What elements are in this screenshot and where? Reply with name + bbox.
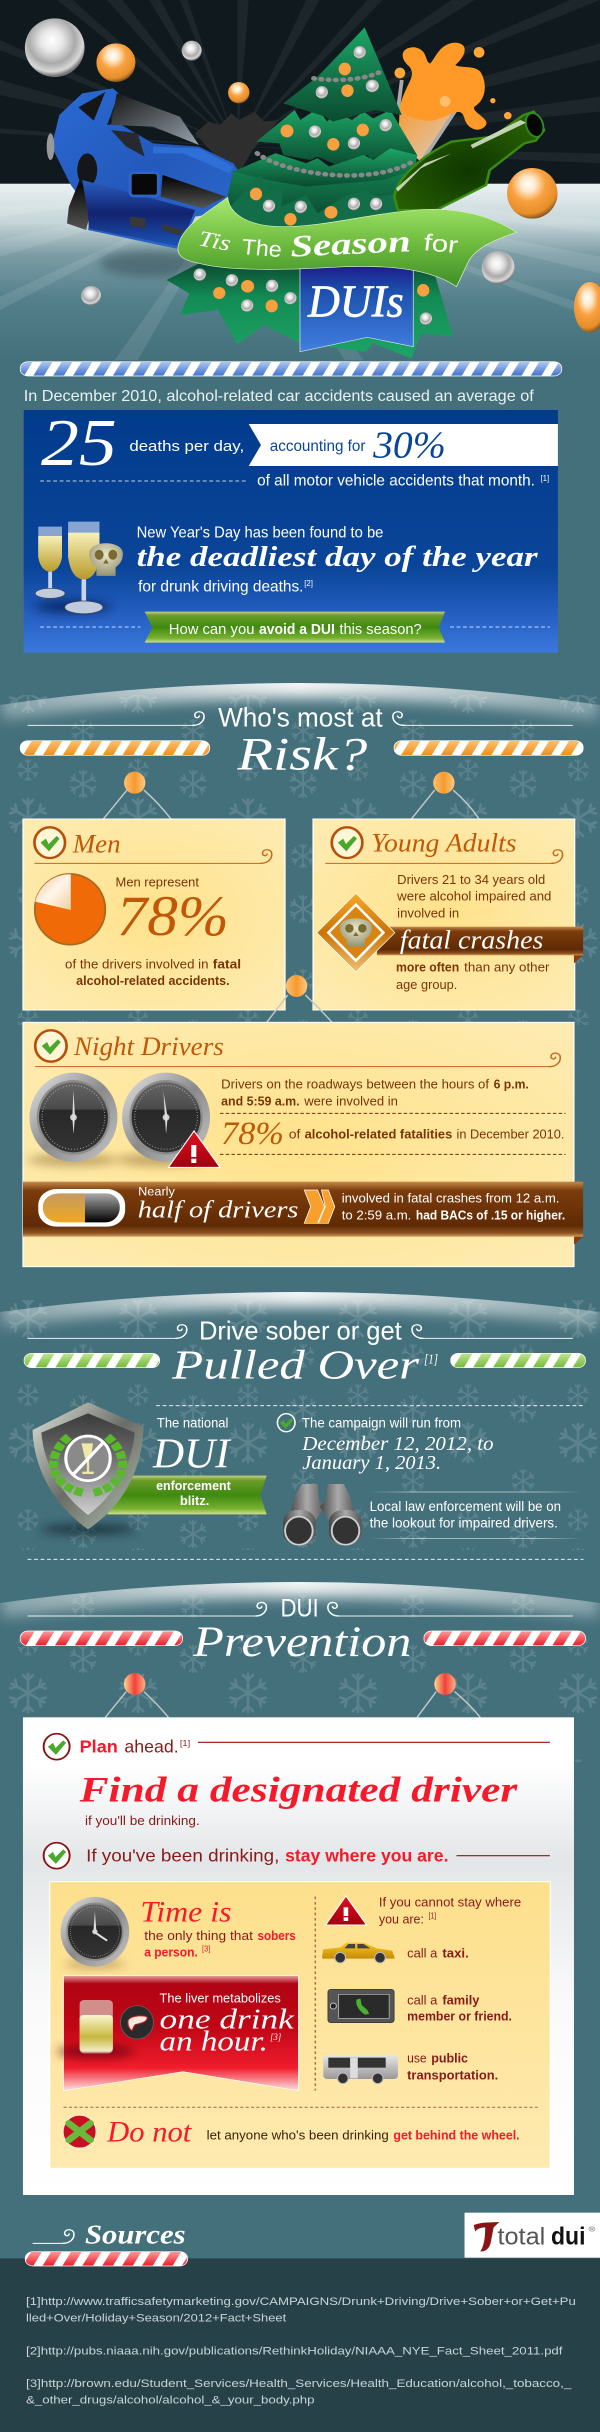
section: who's most at risk bbox=[20, 703, 583, 1023]
text: call a family member: call a bbox=[407, 1993, 437, 2008]
text: plan ahead: ahead. bbox=[124, 1737, 179, 1756]
icon: clock bbox=[61, 1897, 129, 1968]
text: source links: [1]http://www.trafficsafetymarketing.gov/CAMPAIGNS/Drunk+Driving/Drive+Sober+or+Get+Pu bbox=[26, 2295, 576, 2308]
green title banner: for bbox=[422, 230, 460, 259]
heading: who's most at risk: Who's most at bbox=[218, 703, 383, 733]
header illustration bbox=[0, 0, 600, 360]
text: use public transportation: use bbox=[407, 2052, 427, 2066]
text: find a designated driver: Find a designated driver bbox=[78, 1770, 518, 1810]
ribbon: one drink an hour bbox=[57, 1976, 298, 2091]
text: do not: get behind the wheel. bbox=[393, 2128, 520, 2143]
icon: Christmas tree bbox=[224, 27, 417, 230]
stat: 25 deaths: deaths per day, bbox=[129, 439, 244, 455]
text: drivers 21 to 34: were alcohol impaired and bbox=[396, 890, 551, 904]
icon: DUI shield bbox=[33, 1402, 143, 1535]
stat: 30 percent ribbon bbox=[249, 423, 558, 466]
icon: orange drink splash bbox=[395, 43, 512, 162]
red candy bar bbox=[25, 2252, 187, 2266]
text: source links bbox=[26, 2295, 576, 2406]
text: stay where you are: If you've been drinking, bbox=[86, 1846, 279, 1865]
heading: night drivers: Night Drivers bbox=[73, 1033, 224, 1062]
logo: total dui: total bbox=[497, 2224, 545, 2250]
intro sentence: In December 2010, alcohol-related car accidents caused an average of bbox=[24, 388, 534, 405]
text: time is: sobers bbox=[258, 1929, 296, 1944]
text: call a taxi bbox=[407, 1947, 469, 1961]
ribbon: one drink an hour: an hour. bbox=[160, 2026, 268, 2057]
heading: who's most at risk: Risk? bbox=[236, 728, 367, 780]
heading: pulled over: Drive sober or get bbox=[199, 1316, 402, 1345]
text: campaign dates: December 12, 2012, to bbox=[301, 1432, 494, 1455]
ribbon: one drink an hour: The liver metabolizes bbox=[160, 1992, 281, 2006]
icon: warning triangle bbox=[168, 1131, 220, 1167]
ribbon: fatal crashes bbox=[377, 926, 583, 963]
text: call a taxi: taxi. bbox=[442, 1947, 469, 1961]
logo: total dui bbox=[465, 2213, 600, 2258]
stat: 78 percent of fatalities: of bbox=[289, 1128, 300, 1142]
text: use public transportation bbox=[407, 2052, 498, 2083]
text: stay where you are bbox=[86, 1846, 448, 1865]
ribbon: half of drivers: Nearly bbox=[138, 1184, 175, 1198]
text: hours: 6 p.m. bbox=[494, 1077, 529, 1092]
orange candy bars bbox=[20, 741, 583, 755]
icon: check mark bbox=[44, 1843, 70, 1869]
text: call a family member: member or friend. bbox=[407, 2010, 512, 2024]
callout: how can you avoid a DUI: this season? bbox=[339, 622, 422, 638]
text: deadliest day: New Year's Day has been found to be bbox=[137, 524, 383, 541]
icon: phone bbox=[328, 1989, 394, 2023]
text: do not: Do not bbox=[106, 2115, 192, 2148]
icon: right clock bbox=[116, 1073, 210, 1166]
text: fatal accidents: alcohol-related accidents. bbox=[76, 974, 230, 989]
text: if you cannot stay bbox=[379, 1896, 521, 1927]
text: campaign dates: January 1, 2013. bbox=[302, 1451, 441, 1474]
ribbon: half of drivers bbox=[23, 1182, 583, 1244]
heading: sources: Sources bbox=[85, 2220, 186, 2250]
text: plan ahead: [1] bbox=[180, 1739, 190, 1748]
logo: total dui: dui bbox=[551, 2221, 585, 2250]
text: time is: [3] bbox=[202, 1944, 210, 1954]
blue DUIs flag: DUIs bbox=[307, 278, 404, 327]
section: DUI prevention bbox=[20, 1594, 585, 2195]
text: deadliest day: for drunk driving deaths. bbox=[138, 578, 303, 595]
heading: sources bbox=[33, 2220, 186, 2250]
text: drivers 21 to 34: Drivers 21 to 34 years old bbox=[397, 873, 545, 888]
text: if you cannot stay: If you cannot stay where bbox=[379, 1896, 521, 1910]
ribbon: half of drivers: half of drivers bbox=[138, 1196, 298, 1223]
text: fatal accidents bbox=[65, 957, 241, 989]
text: use public transportation: public bbox=[431, 2052, 468, 2066]
text: drivers 21 to 34 bbox=[396, 873, 551, 921]
heading: DUI prevention: DUI bbox=[280, 1594, 319, 1622]
text: drivers 21 to 34: involved in bbox=[397, 906, 459, 921]
icon: check mark bbox=[332, 827, 362, 858]
text: deadliest day bbox=[137, 524, 539, 595]
text: of all motor vehicle accidents: [1] bbox=[541, 474, 549, 483]
stat: 78 percent of fatalities: in December 2010. bbox=[457, 1128, 564, 1142]
section: drive sober or get pulled over bbox=[24, 1316, 585, 1559]
text: local law enforcement: Local law enforcement will be on bbox=[370, 1499, 561, 1515]
ribbon: one drink an hour: one drink bbox=[160, 2003, 295, 2035]
icon: red X bbox=[63, 2115, 96, 2148]
icon: left clock bbox=[28, 1073, 118, 1166]
text: local law enforcement bbox=[370, 1499, 561, 1531]
green enforcement banner: enforcement bbox=[156, 1479, 231, 1494]
stat: 78 percent of fatalities: 78% bbox=[221, 1115, 284, 1151]
callout: how can you avoid a DUI bbox=[145, 612, 445, 643]
green enforcement banner bbox=[107, 1476, 267, 1514]
heading: DUI prevention: Prevention bbox=[192, 1618, 411, 1666]
text: fatal accidents: of the drivers involved in bbox=[65, 957, 209, 972]
tree baubles bbox=[194, 46, 432, 325]
snow decoration: risk section bbox=[0, 683, 600, 1025]
text: source links: lled+Over/Holiday+Season/2012+Fact+Sheet bbox=[26, 2311, 287, 2324]
stat: 30 percent ribbon: 30% bbox=[372, 423, 446, 466]
text: deadliest day: [2] bbox=[304, 579, 313, 588]
snow decoration: prevention section bbox=[0, 1582, 600, 1762]
pins and strings bbox=[103, 772, 479, 819]
green title banner: Tis bbox=[196, 227, 233, 256]
text: more often bbox=[396, 961, 550, 993]
text: source links: [3]http://brown.edu/Student_Services/Health_Services/Health_Education/alcohol,_tobacco,_ bbox=[26, 2377, 572, 2390]
text: use public transportation: transportation. bbox=[407, 2068, 498, 2083]
text: hours bbox=[221, 1077, 529, 1109]
blue candy bar bbox=[20, 362, 562, 376]
green enforcement banner: blitz. bbox=[180, 1494, 209, 1509]
text: hours: and 5:59 a.m. bbox=[221, 1094, 300, 1109]
icon: check mark bbox=[35, 1030, 67, 1062]
text: if you cannot stay: [1] bbox=[429, 1911, 436, 1920]
logo: total dui: ® bbox=[589, 2226, 596, 2234]
text: local law enforcement: the lookout for impaired drivers. bbox=[370, 1516, 558, 1531]
text: call a family member bbox=[407, 1993, 512, 2024]
ribbon: one drink an hour: [3] bbox=[270, 2033, 281, 2043]
panel: white prevention card bbox=[23, 1717, 574, 2195]
icon: grey crash burst bbox=[195, 112, 279, 177]
text: call a taxi: call a bbox=[407, 1947, 437, 1961]
icon: champagne glasses and skull bbox=[34, 522, 123, 614]
icon: small check bbox=[277, 1414, 295, 1432]
text: more often: more often bbox=[396, 961, 459, 975]
heading: pulled over: Pulled Over bbox=[171, 1341, 420, 1388]
green title banner: Season bbox=[289, 225, 412, 264]
text: time is: the only thing that bbox=[144, 1929, 253, 1944]
ornament balls bbox=[25, 18, 600, 333]
ribbon: half of drivers: involved in fatal crashes from 12 a.m. bbox=[342, 1192, 559, 1205]
snowy ground with rays bbox=[0, 184, 600, 360]
stat: 30 percent ribbon: accounting for bbox=[270, 438, 366, 455]
stat: 25 deaths bbox=[41, 406, 244, 480]
green title banner: The bbox=[241, 235, 283, 263]
ribbon: half of drivers: to 2:59 a.m. bbox=[342, 1208, 411, 1222]
footer: sources bbox=[0, 2213, 600, 2432]
icon: green bottle bbox=[394, 112, 546, 210]
ribbon: half of drivers: had BACs of .15 or higher. bbox=[416, 1208, 565, 1222]
text: plan ahead bbox=[80, 1737, 190, 1756]
pins and strings bbox=[105, 1673, 480, 1717]
text: the national DUI: The national bbox=[157, 1415, 228, 1431]
icon: check mark bbox=[44, 1734, 70, 1760]
heading: DUI prevention bbox=[28, 1594, 573, 1666]
panel: young adults bbox=[313, 819, 583, 1010]
icon: taxi bbox=[322, 1943, 395, 1963]
text: deadliest day: the deadliest day of the year bbox=[137, 541, 539, 573]
green candy bars bbox=[24, 1353, 585, 1368]
text: fatal accidents: fatal bbox=[213, 957, 241, 972]
stat: men represent 78 percent: 78% bbox=[117, 886, 229, 948]
text: campaign dates bbox=[301, 1415, 494, 1474]
panel: blue statistics bbox=[24, 406, 558, 653]
text: find a designated driver bbox=[78, 1770, 518, 1828]
stat: 78 percent of fatalities bbox=[221, 1115, 564, 1151]
text: source links: [2]http://pubs.niaaa.nih.gov/publications/RethinkHoliday/NIAAA_NYE_Fact_Sheet_2011.pdf bbox=[26, 2344, 563, 2357]
stat: 25 deaths: 25 bbox=[41, 406, 117, 480]
intro section bbox=[20, 362, 562, 653]
center pin and string bbox=[266, 975, 333, 1023]
text: campaign dates: The campaign will run from bbox=[302, 1415, 461, 1431]
text: hours: Drivers on the roadways between the hours of bbox=[221, 1077, 489, 1092]
red candy bars bbox=[20, 1631, 585, 1646]
heading: young adults: Young Adults bbox=[371, 829, 517, 858]
panel: yellow advice box bbox=[50, 1882, 550, 2168]
lower tree branches bbox=[166, 263, 453, 358]
heading: pulled over bbox=[28, 1316, 573, 1388]
text: call a family member: family bbox=[442, 1993, 479, 2008]
icon: pill bbox=[38, 1189, 125, 1227]
text: more often: than any other bbox=[464, 961, 550, 975]
icon: blue car bbox=[47, 88, 247, 249]
pie chart: 78 percent bbox=[35, 874, 105, 945]
ribbon: fatal crashes: fatal crashes bbox=[400, 926, 543, 955]
stat: men represent 78 percent: Men represent bbox=[116, 876, 199, 890]
night sky with rays bbox=[0, 0, 600, 184]
icon: liver bbox=[121, 2006, 153, 2039]
text: find a designated driver: if you'll be drinking. bbox=[85, 1814, 200, 1828]
panel: men bbox=[23, 819, 285, 1010]
panel: night drivers bbox=[23, 1022, 583, 1267]
text: plan ahead: Plan bbox=[80, 1737, 118, 1756]
green title banner bbox=[178, 197, 517, 287]
icon: warning triangle bbox=[326, 1896, 367, 1925]
snow decoration: pulled over section bbox=[0, 1292, 600, 1550]
icon: milk glass bbox=[80, 2000, 113, 2053]
callout: how can you avoid a DUI: avoid a DUI bbox=[259, 622, 335, 638]
icon: binoculars bbox=[283, 1484, 362, 1545]
icon: skull diamond bbox=[317, 893, 395, 972]
heading: who's most at risk bbox=[28, 703, 573, 780]
text: source links: &_other_drugs/alcohol/alcohol_&_your_body.php bbox=[26, 2393, 315, 2406]
text: of all motor vehicle accidents: of all motor vehicle accidents that month. bbox=[257, 473, 535, 489]
heading: men: Men bbox=[72, 830, 121, 859]
icon: bus bbox=[323, 2055, 398, 2084]
blue DUIs flag bbox=[300, 265, 413, 352]
text: time is: Time is bbox=[140, 1895, 232, 1928]
icon: check mark bbox=[34, 827, 65, 858]
text: the national DUI: DUI bbox=[152, 1430, 232, 1477]
icon: chevrons bbox=[304, 1190, 335, 1223]
text: time is bbox=[140, 1895, 296, 1960]
text: hours: were involved in bbox=[303, 1094, 398, 1109]
text: stay where you are: stay where you are. bbox=[285, 1846, 448, 1865]
callout: how can you avoid a DUI: How can you bbox=[169, 622, 254, 638]
text: do not bbox=[106, 2115, 520, 2148]
heading: pulled over: [1] bbox=[424, 1352, 438, 1367]
stat: 78 percent of fatalities: alcohol-related fatalities bbox=[305, 1128, 452, 1142]
text: more often: age group. bbox=[396, 978, 457, 993]
text: do not: let anyone who's been drinking bbox=[207, 2128, 389, 2143]
text: time is: a person. bbox=[144, 1946, 198, 1960]
text: if you cannot stay: you are: bbox=[379, 1912, 424, 1927]
